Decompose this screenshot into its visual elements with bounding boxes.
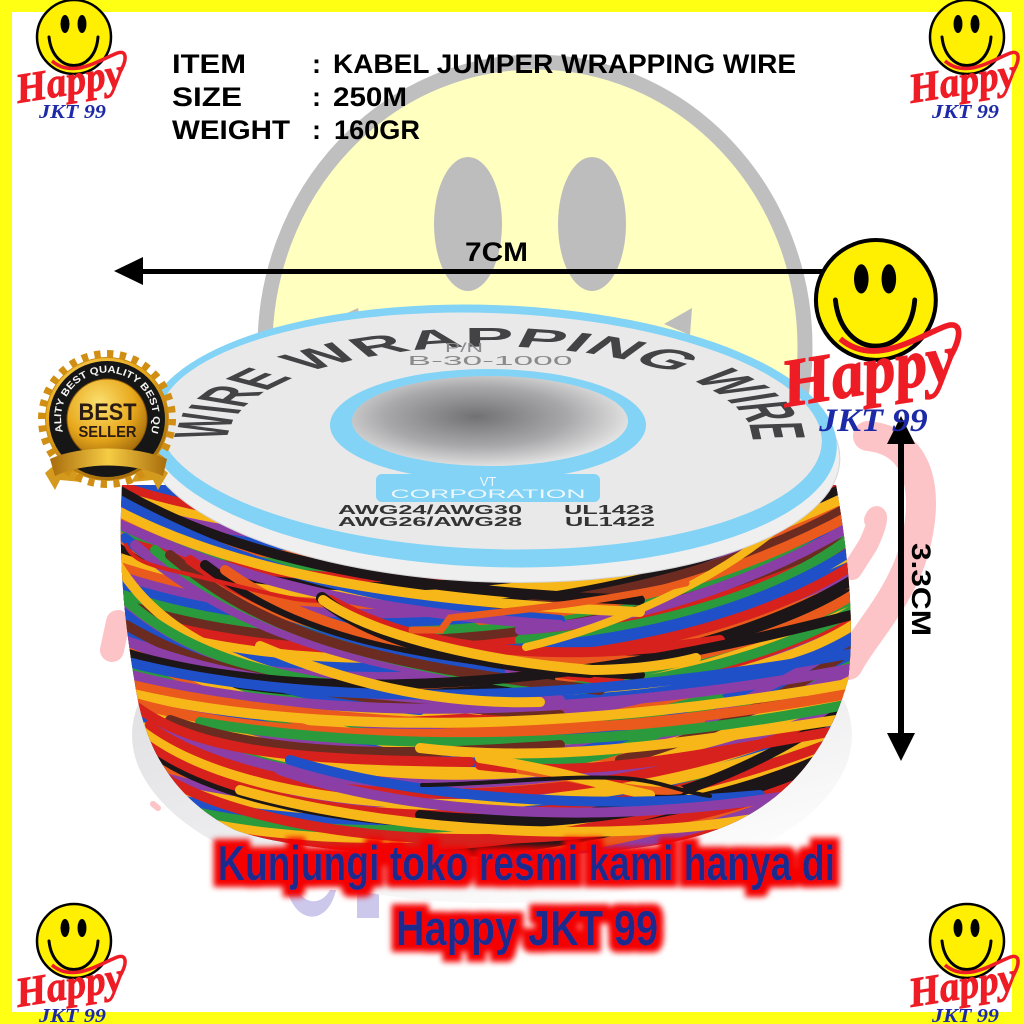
ring lettering — [61, 373, 153, 432]
part number: P/N — [445, 340, 483, 355]
disc face — [154, 301, 826, 561]
logo: top left: JKT 99 — [38, 101, 106, 123]
feature wires — [126, 533, 820, 832]
vendor box — [376, 474, 600, 502]
badge teeth — [45, 357, 169, 481]
lavender watermark remnants — [288, 890, 379, 918]
middle horizontal wires — [115, 610, 870, 769]
badge label: BEST — [78, 399, 137, 426]
part code: B-30-1000 — [408, 353, 572, 368]
badge black ring — [49, 361, 165, 477]
vendor box: VT — [480, 474, 496, 489]
product spec text: KABEL JUMPER WRAPPING WIRE — [333, 49, 796, 79]
height dimension arrow — [887, 416, 936, 761]
rising right wires — [474, 488, 851, 700]
badge gold ring — [46, 358, 168, 480]
specs on disc — [338, 503, 655, 529]
specs on disc: AWG24/AWG30 — [338, 503, 522, 517]
height dimension arrow: 3.3CM — [906, 543, 936, 636]
wire coil — [120, 485, 851, 856]
best seller badge — [38, 350, 176, 490]
logo: bottom right: Happy — [904, 954, 1020, 1017]
ribbon band — [50, 448, 167, 476]
logo: top right: Happy — [904, 50, 1020, 113]
width dimension arrow: 7CM — [465, 237, 528, 267]
base coil layers — [120, 485, 851, 856]
disc lip — [140, 302, 844, 594]
spool top disc — [158, 304, 840, 583]
product spec text: : — [312, 49, 321, 79]
watermark: pale pink script strokes — [112, 436, 921, 808]
badge gold centre — [67, 379, 147, 459]
logo: top left — [11, 0, 127, 123]
call to action line one: Kunjungi toko resmi kami hanya di — [218, 837, 835, 891]
logo: top right: JKT 99 — [931, 101, 999, 123]
curved disc title: WIRE WRAPPING WIRE — [174, 328, 805, 440]
vendor box: CORPORATION — [390, 487, 586, 501]
call to action line two: Happy JKT 99 — [396, 902, 658, 956]
logo: large centre right — [775, 240, 961, 439]
specs on disc: UL1423 — [564, 503, 654, 517]
logo: bottom left — [11, 904, 127, 1024]
product spec text: : — [312, 82, 321, 112]
specs on disc: AWG26/AWG28 — [338, 515, 522, 529]
ribbon tails — [45, 455, 168, 490]
bottom coil wires — [140, 630, 850, 839]
lower spool flange — [132, 567, 852, 903]
width dimension arrow — [114, 237, 840, 285]
watermark: pale smiley face — [265, 62, 805, 632]
logo: bottom right — [904, 904, 1020, 1024]
logo: top left: Happy — [11, 50, 127, 113]
logo: bottom left: Happy — [11, 954, 127, 1017]
descending left wires — [110, 485, 720, 715]
product spec text: : — [312, 115, 321, 145]
hole — [352, 376, 628, 466]
hole blue ring — [330, 369, 646, 481]
disc blue rim — [143, 293, 841, 579]
product spec text — [172, 49, 796, 145]
product spec text: SIZE — [172, 82, 242, 112]
logo: large centre right: Happy — [775, 319, 961, 422]
product spec text: 250M — [333, 82, 407, 112]
product spec text: WEIGHT — [172, 115, 291, 145]
logo: large centre right: JKT 99 — [818, 403, 928, 439]
product spec text: 160GR — [334, 115, 420, 145]
product spec text: ITEM — [172, 49, 246, 79]
specs on disc: UL1422 — [565, 515, 655, 529]
logo: top right — [904, 0, 1020, 123]
best seller badge: SELLER — [78, 424, 137, 441]
